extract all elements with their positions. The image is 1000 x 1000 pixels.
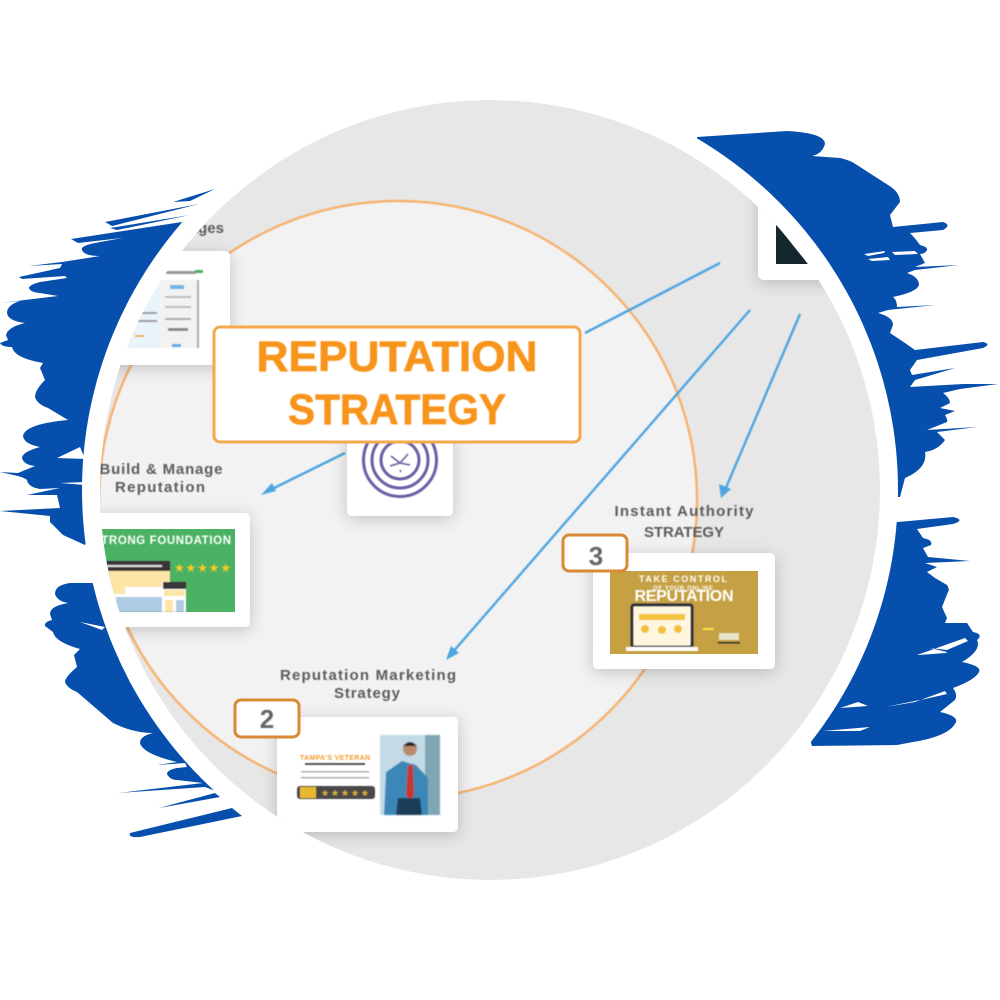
brush: white gaps in paint xyxy=(57,251,968,731)
brush: lower left streaks xyxy=(130,793,242,837)
arrows xyxy=(261,263,800,660)
banner text: STRONG FOUNDATION xyxy=(93,535,231,547)
arrow to reputation marketing xyxy=(452,310,750,653)
banner text: REPUTATION xyxy=(634,588,734,605)
label: reputation marketing xyxy=(280,667,456,702)
label: pages: Pages xyxy=(180,220,224,237)
title box background xyxy=(214,327,580,442)
title box xyxy=(214,327,580,442)
title text xyxy=(256,333,538,434)
badge: number 2: 2 xyxy=(260,704,274,734)
card background xyxy=(751,202,824,290)
circular panel xyxy=(60,100,880,880)
title text: REPUTATION xyxy=(256,333,538,381)
label: build and manage: Reputation xyxy=(115,479,205,496)
arrow to instant authority xyxy=(725,314,800,490)
card: build and manage reputation xyxy=(100,462,258,638)
card: pages xyxy=(118,224,238,376)
label: reputation marketing: Reputation Marketing xyxy=(280,667,456,684)
banner text: TAKE CONTROL xyxy=(639,574,728,584)
label: instant authority: Instant Authority xyxy=(614,503,754,520)
label: instant authority: STRATEGY xyxy=(644,524,724,541)
card: instant authority xyxy=(593,503,775,669)
label: instant authority xyxy=(614,504,754,538)
page thumbnail xyxy=(127,269,204,348)
arrow to build and manage xyxy=(268,263,720,491)
brush: lower left xyxy=(45,583,240,800)
thumbnail: expert text: ★★★★★ xyxy=(321,788,369,798)
thumbnail: expert text: TAMPA'S VETERAN xyxy=(300,755,370,762)
badge: number 3 xyxy=(563,535,627,571)
card background xyxy=(277,717,458,832)
icon: dark tile xyxy=(776,224,808,264)
panel: gray disc xyxy=(100,100,880,880)
card: top right icon xyxy=(751,202,824,290)
laptop xyxy=(626,605,740,651)
thumbnail: green banner xyxy=(100,529,235,612)
banner text xyxy=(634,574,734,602)
label: build and manage xyxy=(100,461,222,496)
card: center target icon xyxy=(340,444,460,526)
brush: lower right xyxy=(780,517,980,746)
white ring xyxy=(82,82,898,898)
thumbnail: businessman photo xyxy=(380,735,440,815)
card: reputation marketing xyxy=(277,667,458,832)
label: build and manage: Build & Manage xyxy=(100,461,222,478)
banner text: OF YOUR ONLINE xyxy=(653,586,713,592)
label: reputation marketing: Strategy xyxy=(334,685,401,702)
thumbnail: expert text xyxy=(297,755,375,799)
badge: number 2 xyxy=(235,700,299,737)
icon: concentric circles xyxy=(361,444,439,499)
brush: upper right xyxy=(697,131,998,497)
rating stars: ★★★★★ xyxy=(174,561,231,575)
thumbnail: gold banner xyxy=(610,571,758,654)
card background xyxy=(593,553,775,669)
thumbnail background xyxy=(127,283,160,348)
arrowheads xyxy=(261,483,731,660)
title text: STRATEGY xyxy=(288,386,506,434)
badge: number 3: 3 xyxy=(589,541,603,571)
browser mockup xyxy=(100,561,186,612)
brush: upper left streaks xyxy=(105,189,215,230)
card background xyxy=(340,444,460,526)
card background xyxy=(118,247,238,376)
brush strokes: blue paint behind circle xyxy=(0,131,998,837)
card background xyxy=(60,513,250,627)
orange ring xyxy=(99,201,697,799)
brush: middle left xyxy=(0,222,190,545)
